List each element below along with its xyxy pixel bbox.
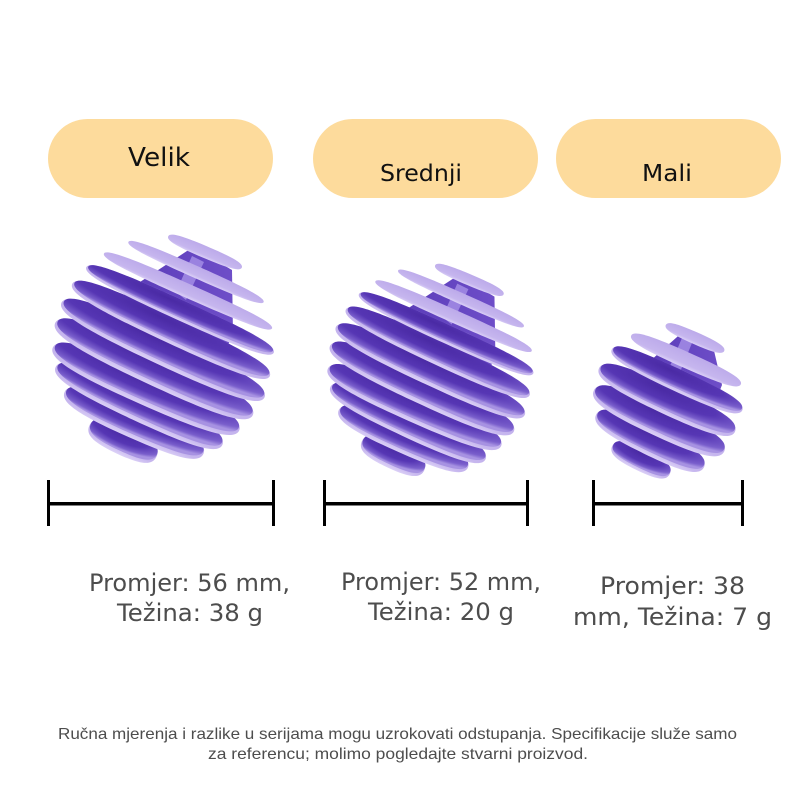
spec text: small: mm, Težina: 7 g	[573, 603, 772, 631]
spec text: medium: Promjer: 52 mm,	[341, 568, 541, 596]
pill: Mali: Mali	[642, 161, 692, 187]
dimension bar: medium	[323, 480, 529, 526]
pill: Velik	[48, 119, 273, 198]
dimension bar: large	[47, 480, 275, 526]
icon: large purple ball	[46, 231, 278, 469]
dimension bar: small	[592, 480, 744, 526]
footnote: za referencu; molimo pogledajte stvarni proizvod.	[208, 746, 588, 763]
spec text: small	[573, 572, 772, 631]
spec text: large: Težina: 38 g	[116, 599, 263, 627]
pill: Srednji: Srednji	[380, 161, 462, 187]
pill: Srednji	[313, 119, 538, 198]
icon: medium purple ball	[322, 260, 537, 482]
footnote: Ručna mjerenja i razlike u serijama mogu uzrokovati odstupanja. Specifikacije služe samo	[58, 726, 737, 743]
spec text: large: Promjer: 56 mm,	[89, 569, 290, 597]
pill: Velik: Velik	[128, 143, 190, 173]
spec text: small: Promjer: 38	[600, 572, 745, 600]
footnote	[58, 726, 737, 763]
spec text: medium: Težina: 20 g	[367, 598, 514, 626]
pill: Mali	[556, 119, 781, 198]
spec text: large	[89, 569, 290, 627]
icon: small purple ball	[587, 320, 747, 484]
spec text: medium	[341, 568, 541, 626]
